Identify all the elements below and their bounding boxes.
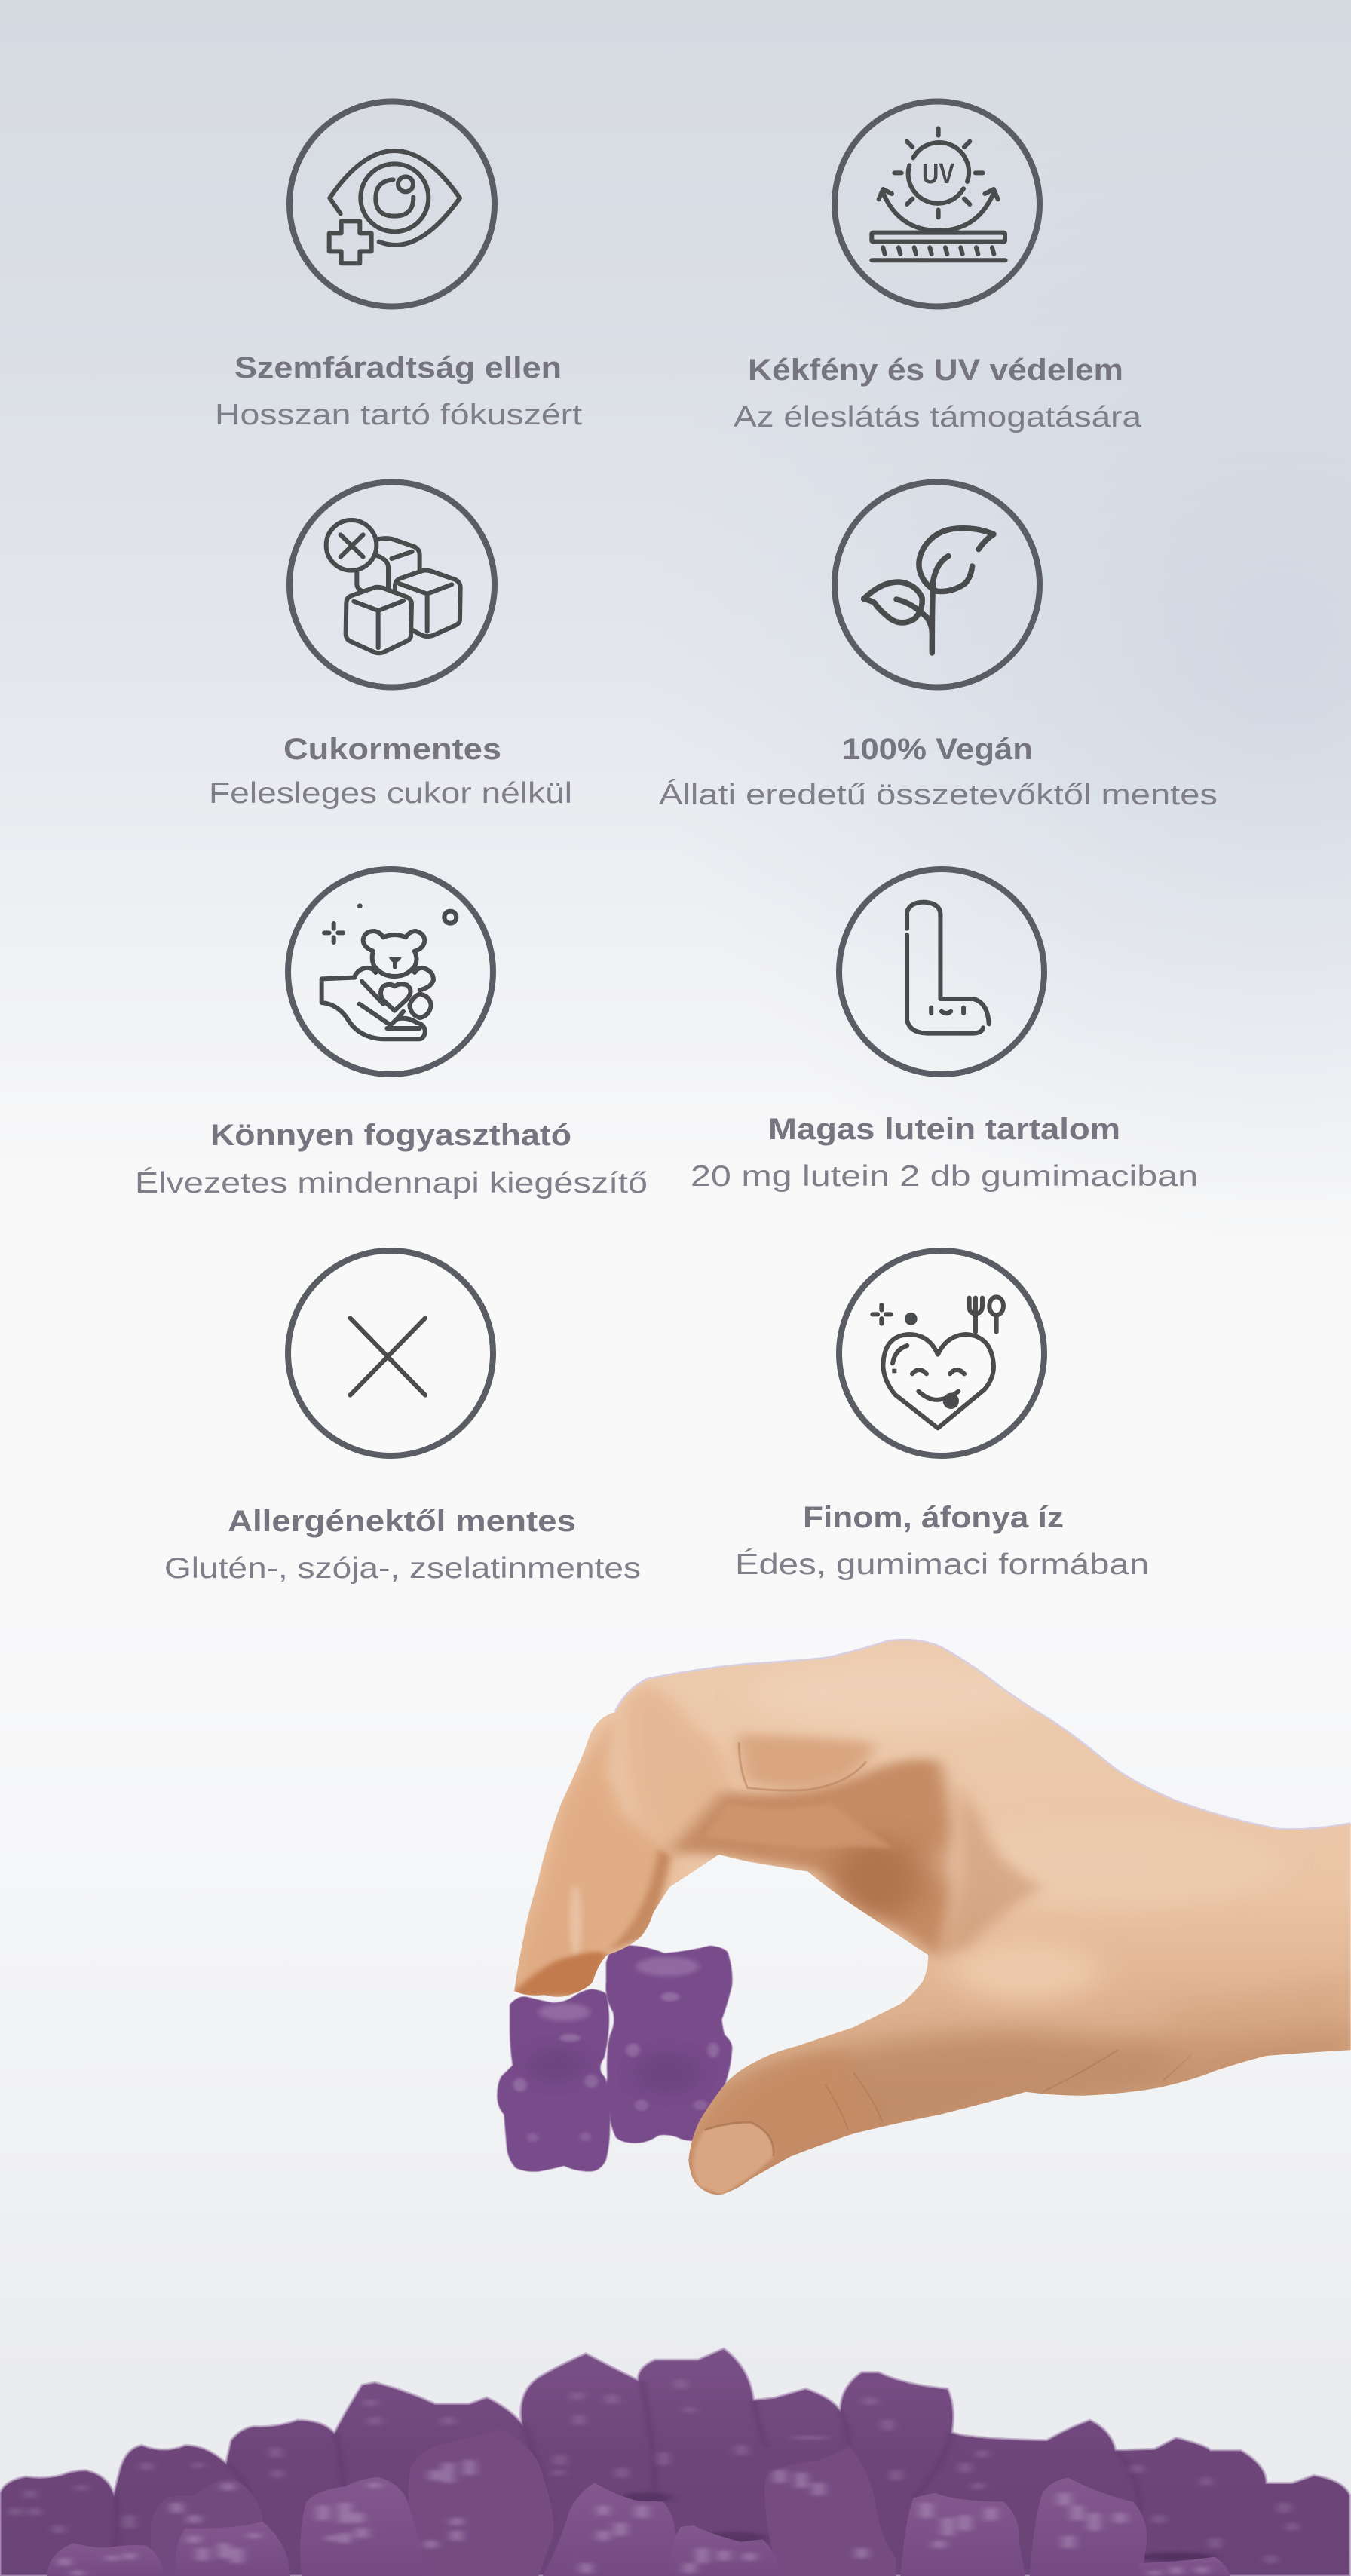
heading: Szemfáradtság ellen (234, 351, 562, 384)
heading: Allergénektől mentes (228, 1505, 576, 1538)
heading: Kékfény és UV védelem (748, 354, 1123, 387)
description: Hosszan tartó fókuszért (215, 399, 582, 431)
panel: allergen free (164, 1251, 641, 1585)
thumb nail (693, 2122, 774, 2195)
description: Élvezetes mindennapi kiegészítő (135, 1167, 648, 1199)
description: 20 mg lutein 2 db gumimaciban (691, 1160, 1198, 1193)
gummy bear: left (497, 1989, 611, 2172)
heading: Magas lutein tartalom (768, 1113, 1120, 1146)
panel: eye strain (215, 101, 582, 431)
icon label: UV: UV (922, 158, 955, 190)
finger shading (514, 1712, 676, 1995)
panel: sugar free (209, 482, 572, 810)
description: Az éleslátás támogatására (734, 401, 1141, 433)
description: Glutén-, szója-, zselatinmentes (164, 1552, 641, 1585)
palm fold shadow (667, 1760, 953, 1959)
heading: Finom, áfonya íz (803, 1501, 1064, 1534)
heading: Könnyen fogyasztható (210, 1119, 571, 1152)
gummy bear: right (605, 1945, 732, 2143)
description: Felesleges cukor nélkül (209, 777, 572, 810)
panel: high lutein content (691, 869, 1198, 1193)
icon: eye with medical cross (290, 101, 495, 306)
front row of bears (47, 2429, 1230, 2576)
icon: plant sprout (835, 482, 1040, 688)
gummy bear pile (0, 2348, 1350, 2576)
back row of bears (0, 2348, 1350, 2576)
panel: easy to consume (135, 869, 648, 1199)
back of hand highlight (777, 1671, 1018, 1717)
heading: 100% Vegán (842, 733, 1033, 766)
hand (498, 1632, 1351, 2202)
description: Édes, gumimaci formában (735, 1548, 1149, 1581)
lower palm and thumb shading (699, 2023, 1351, 2202)
illustration: hand holding two gummy bears (497, 1632, 1351, 2202)
heading: Cukormentes (283, 733, 501, 766)
icon: cross mark (288, 1251, 493, 1456)
panel: blue light and UV protection (734, 101, 1141, 433)
icon: smiling heart with cutlery (839, 1251, 1044, 1456)
icon: crossed out sugar cubes (290, 482, 495, 688)
description: Állati eredetű összetevőktől mentes (659, 779, 1218, 811)
icon: hand holding teddy bear (288, 869, 493, 1074)
panel: vegan (659, 482, 1218, 811)
wrist fade (1177, 1987, 1342, 2069)
icon: letter L with face (839, 869, 1044, 1074)
icon: UV sun over layer (835, 101, 1040, 306)
panel: tasty blueberry flavour (735, 1251, 1149, 1581)
